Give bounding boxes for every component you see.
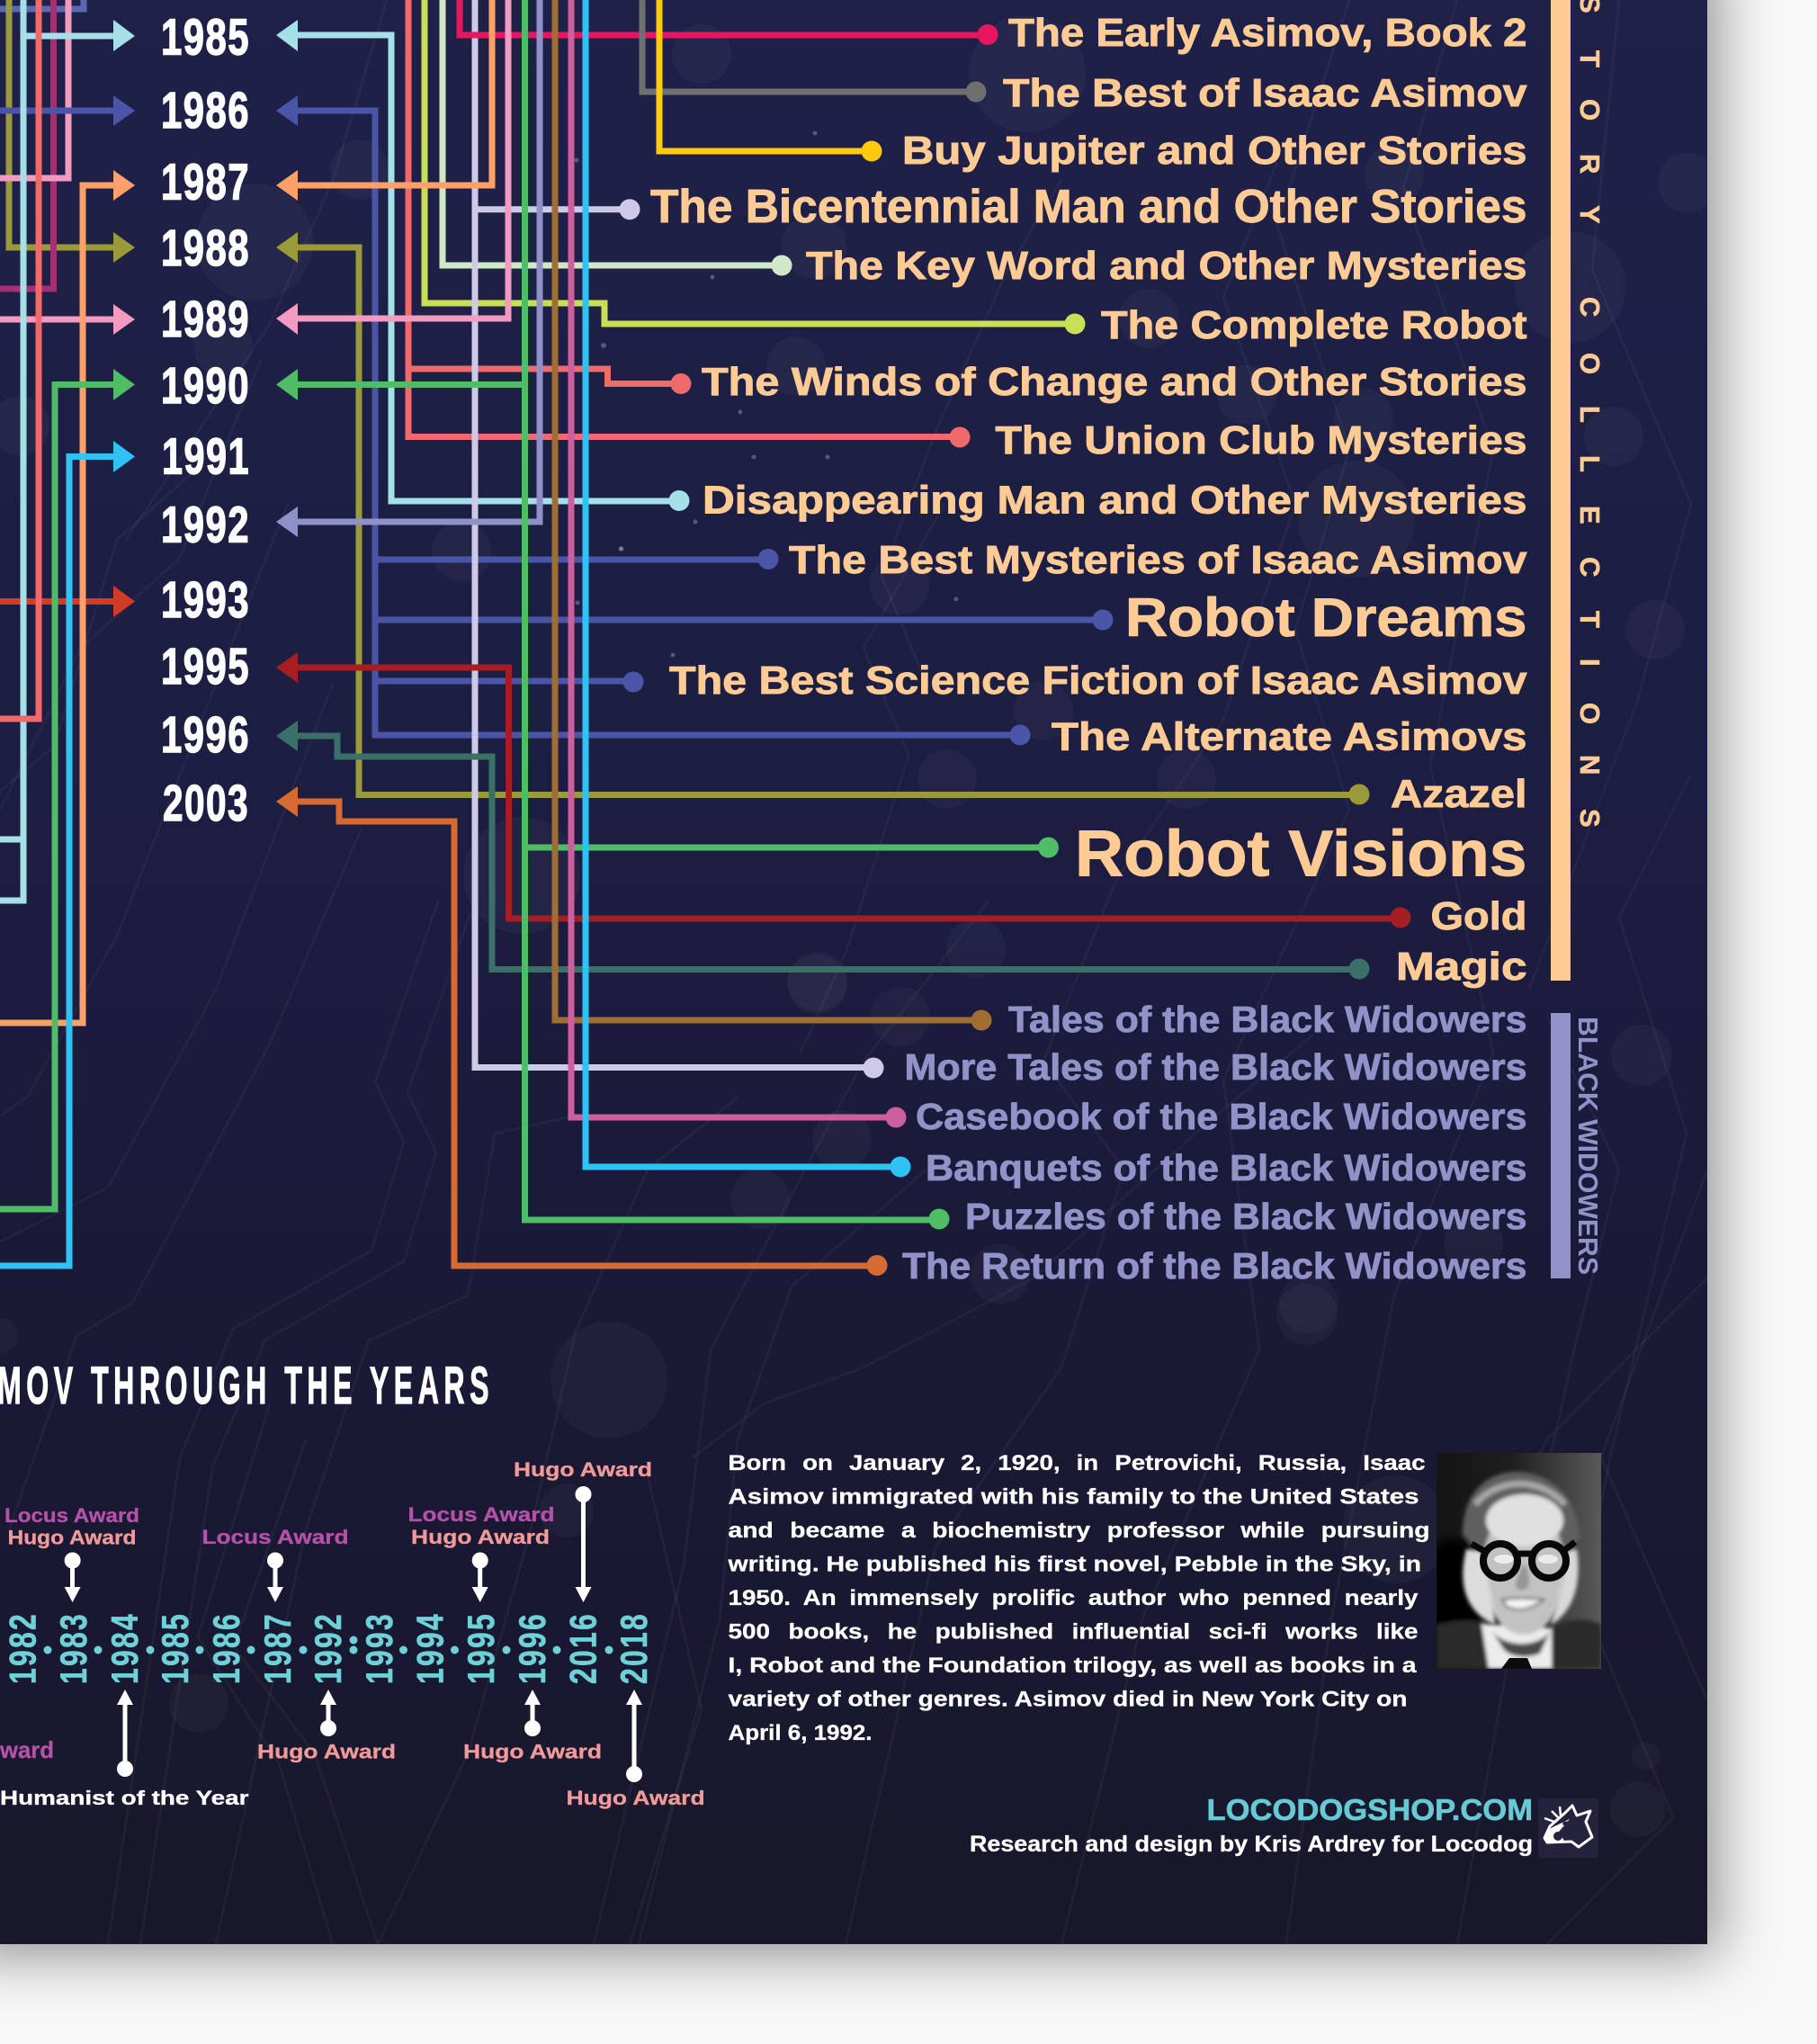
biography text: 1950. An immensely prolific author who penned nearly <box>729 1586 1419 1610</box>
timeline years <box>2 1612 655 1684</box>
black widowers titles: More Tales of the Black Widowers <box>905 1046 1527 1088</box>
left connector to 1989 <box>0 304 135 335</box>
portrait of Isaac Asimov <box>1420 1453 1601 1669</box>
timeline years: 1986 <box>205 1612 247 1684</box>
left connector: pink <box>0 0 68 178</box>
connector: 1992 periwinkle <box>276 0 540 537</box>
portrait white sideburns <box>1463 1549 1579 1625</box>
black widowers titles: Banquets of the Black Widowers <box>926 1147 1527 1188</box>
timeline separator dots <box>43 1636 613 1654</box>
story collection titles: Gold <box>1430 894 1527 938</box>
award labels: Hugo Award <box>411 1526 550 1548</box>
award arrows pointing down <box>65 1486 592 1602</box>
biography text: 500 books, he published influential sci-fi works like <box>729 1620 1418 1645</box>
award timeline <box>0 1458 705 1809</box>
award labels: Hugo Award <box>514 1458 652 1481</box>
story collection titles <box>650 11 1527 989</box>
year labels column: 1991 <box>162 428 250 486</box>
story collection titles: The Complete Robot <box>1101 303 1527 347</box>
year labels column: 1985 <box>161 9 250 67</box>
connector group: all timeline lines <box>0 0 1410 1276</box>
story collection titles: Robot Dreams <box>1125 587 1527 648</box>
timeline years: 1982 <box>2 1612 43 1684</box>
black widowers titles: Tales of the Black Widowers <box>1008 999 1527 1040</box>
biography text: Born on January 2, 1920, in Petrovichi, Russia, Isaac <box>729 1451 1425 1475</box>
connector: Union Club and Winds of Change <box>408 0 970 448</box>
black widowers titles: Casebook of the Black Widowers <box>916 1096 1527 1137</box>
icon: locodog logo <box>1538 1798 1598 1858</box>
website credit: LOCODOGSHOP.COM <box>1207 1793 1533 1826</box>
year labels column: 1989 <box>161 291 250 348</box>
story collection titles: Azazel <box>1391 772 1527 816</box>
year labels column: 1988 <box>161 220 250 277</box>
connector: 1996 Magic <box>276 721 1369 979</box>
timeline years: 1985 <box>154 1612 196 1684</box>
connector: Tales of the Black Widowers <box>555 0 991 1031</box>
heading: through the years: MOV THROUGH THE YEARS <box>0 1357 494 1415</box>
timeline years: 1993 <box>358 1612 400 1684</box>
biography text: variety of other genres. Asimov died in New York City on <box>729 1688 1407 1712</box>
website credit <box>970 1793 1533 1857</box>
website credit: Research and design by Kris Ardrey for Locodog <box>970 1832 1533 1857</box>
award labels: Humanist of the Year <box>0 1787 249 1809</box>
timeline years: 2018 <box>613 1612 655 1684</box>
timeline years: 1984 <box>103 1612 146 1684</box>
timeline years: 1996 <box>511 1612 553 1684</box>
connector: 1987 orange <box>276 0 492 201</box>
biography text: I, Robot and the Foundation trilogy, as well as books in a <box>729 1654 1417 1678</box>
connector: Casebook <box>571 0 907 1128</box>
story collection titles: Buy Jupiter and Other Stories <box>902 129 1527 173</box>
story collection titles: The Bicentennial Man and Other Stories <box>650 181 1527 233</box>
portrait glasses <box>1472 1542 1575 1578</box>
connector: Buy Jupiter <box>659 0 882 162</box>
story collection titles: The Alternate Asimovs <box>1052 714 1527 759</box>
black widowers titles: The Return of the Black Widowers <box>902 1245 1527 1286</box>
timeline years: 1987 <box>256 1612 299 1684</box>
connector: lavender to Bicentennial and More Tales <box>475 0 883 1078</box>
left connector to 1986 <box>0 95 135 126</box>
award arrows pointing up <box>117 1690 642 1782</box>
award labels: ward <box>0 1736 54 1763</box>
black widowers titles <box>902 999 1527 1286</box>
year labels column: 1992 <box>161 497 250 554</box>
bracket: story collections <box>1551 0 1606 981</box>
timeline years: 1992 <box>307 1612 349 1684</box>
connector: 1990 green to Puzzles and Robot Visions <box>276 0 1059 1229</box>
black widowers titles: Puzzles of the Black Widowers <box>965 1196 1527 1237</box>
story collection titles: The Key Word and Other Mysteries <box>806 244 1527 288</box>
biography text: April 6, 1992. <box>729 1721 873 1745</box>
award labels: Hugo Award <box>7 1526 137 1549</box>
left connector to 1988 <box>9 0 135 263</box>
bracket: story collections: STORY COLLECTIONS <box>1574 0 1606 828</box>
connector: Banquets <box>586 0 910 1177</box>
connector: 1986 blue to four titles <box>276 95 1114 745</box>
portrait backdrop <box>1437 1453 1601 1669</box>
connector: 1995 Gold <box>276 652 1410 928</box>
story collection titles: The Early Asimov, Book 2 <box>1008 11 1527 55</box>
left connector to 1987 <box>0 170 135 1023</box>
award labels: Hugo Award <box>257 1740 396 1763</box>
story collection titles: The Union Club Mysteries <box>995 418 1527 462</box>
bracket: black widowers <box>1551 1013 1604 1278</box>
connector: Early Asimov Book 2 <box>460 0 998 45</box>
timeline years: 1995 <box>460 1612 502 1684</box>
award labels: Locus Award <box>408 1503 554 1526</box>
left connector to 1993 <box>0 586 135 617</box>
left connector to 1991 <box>0 441 135 1266</box>
award labels: Locus Award <box>4 1504 139 1527</box>
year labels column: 1990 <box>161 357 250 415</box>
left connector to 1990 <box>0 369 135 1209</box>
left connector: magenta <box>0 0 54 289</box>
year labels column: 2003 <box>163 775 249 832</box>
award labels <box>0 1458 705 1809</box>
story collection titles: Robot Visions <box>1075 819 1527 891</box>
decorative circuit lines <box>8 513 1707 1944</box>
left connector: coral <box>0 0 39 719</box>
year labels column <box>161 9 250 832</box>
decorative background circles <box>788 955 1338 1333</box>
year labels column: 1995 <box>161 638 250 695</box>
year labels column: 1986 <box>161 82 250 139</box>
year labels column: 1993 <box>161 571 250 629</box>
connector: 1989 pink <box>276 0 508 335</box>
left connector to 1985 <box>0 0 135 901</box>
award labels: Hugo Award <box>567 1787 705 1809</box>
left connector: periwinkle <box>0 0 84 9</box>
story collection titles: The Best Science Fiction of Isaac Asimov <box>669 659 1527 703</box>
award labels: Hugo Award <box>463 1740 602 1763</box>
story collection titles: The Best of Isaac Asimov <box>1003 71 1527 115</box>
year labels column: 1996 <box>161 706 250 764</box>
story collection titles: Disappearing Man and Other Mysteries <box>703 479 1527 522</box>
biography text: writing. He published his first novel, Pebble in the Sky, in <box>727 1553 1421 1577</box>
biography text <box>727 1451 1430 1745</box>
portrait soft shapes <box>1420 1472 1601 1669</box>
connector: The Key Word <box>443 0 792 275</box>
biography text: and became a biochemistry professor while pursuing <box>729 1519 1430 1543</box>
timeline years: 1983 <box>52 1612 94 1684</box>
biography text: Asimov immigrated with his family to the United States <box>729 1485 1419 1510</box>
connector: The Best of Isaac Asimov <box>642 0 986 103</box>
portrait tie <box>1501 1658 1532 1669</box>
timeline years: 1994 <box>408 1612 452 1684</box>
timeline years: 2016 <box>561 1612 604 1684</box>
connector: 2003 Return of the Black Widowers <box>276 786 887 1276</box>
connector: 1985 Disappearing Man <box>276 20 689 511</box>
story collection titles: Magic <box>1396 945 1527 989</box>
story collection titles: The Winds of Change and Other Stories <box>702 360 1527 404</box>
bracket: black widowers: BLACK WIDOWERS <box>1572 1017 1604 1275</box>
year labels column: 1987 <box>161 153 250 211</box>
award labels: Locus Award <box>201 1526 349 1548</box>
story collection titles: The Best Mysteries of Isaac Asimov <box>789 538 1527 582</box>
decorative star specks <box>574 131 959 657</box>
connector: The Complete Robot <box>425 0 1085 335</box>
connector: 1988 Azazel <box>276 232 1369 804</box>
